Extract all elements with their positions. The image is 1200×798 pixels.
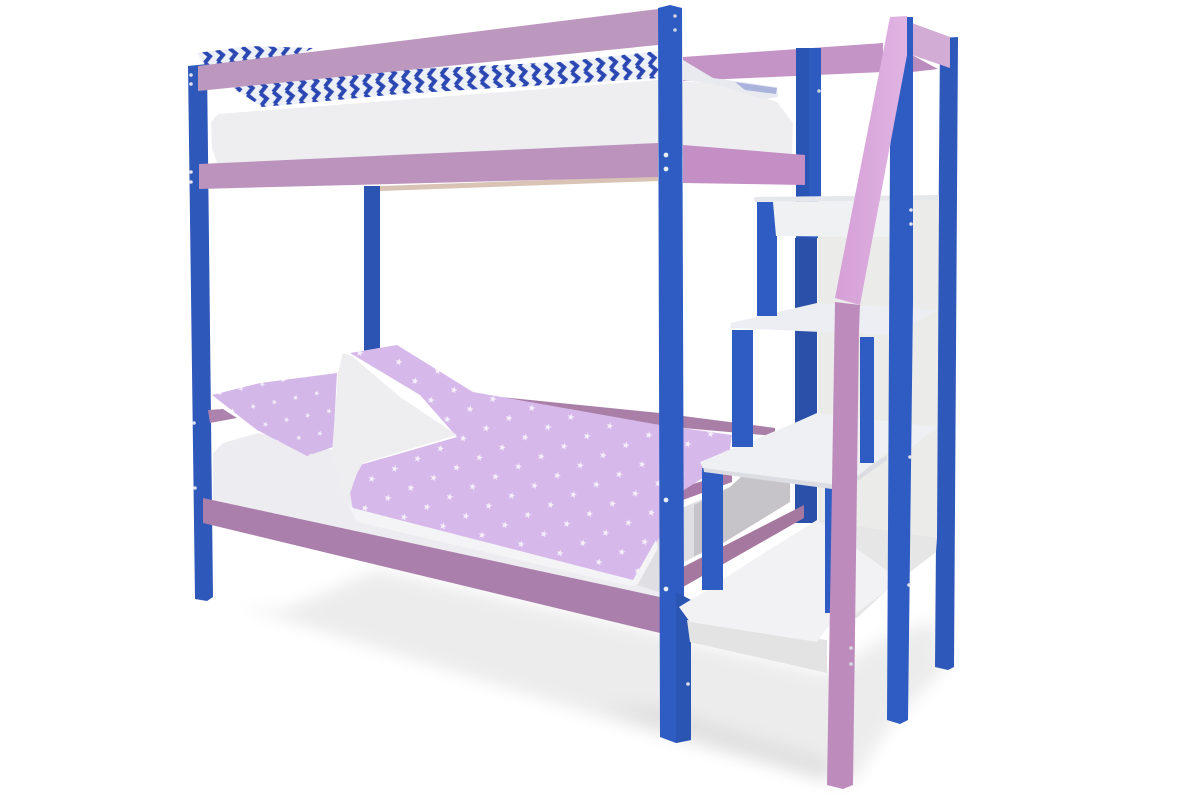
middle stair legs [732, 330, 874, 463]
upper mattress [211, 80, 793, 163]
third stair step [700, 413, 937, 489]
middle front post [658, 5, 691, 743]
lower mattress [213, 433, 660, 600]
stair front post [887, 17, 913, 724]
top stair leg [757, 202, 777, 316]
lower back rail [480, 395, 775, 436]
back pillow chevron [197, 46, 313, 65]
back left post [364, 186, 380, 351]
second stair step [730, 303, 938, 335]
far right post [935, 37, 958, 670]
end rail between stair post and right post [912, 23, 950, 68]
upper front side rail [199, 143, 805, 189]
back rail of upper bunk [683, 43, 938, 81]
upper slats [380, 176, 658, 191]
top stair step [754, 195, 939, 237]
stair handrail [827, 16, 907, 789]
upper chevron blanket [233, 51, 778, 107]
lower right lilac rails [683, 472, 804, 587]
upper front guard rail [198, 9, 658, 91]
stair legs [702, 468, 832, 613]
folded white sheet [332, 353, 457, 505]
lower front rail [203, 498, 660, 633]
lower star blanket [347, 345, 732, 586]
mattress right side [637, 475, 790, 600]
pillow [212, 373, 337, 456]
bottom stair step [679, 520, 937, 673]
floor shadow [240, 570, 945, 782]
lower left rail stub [208, 409, 237, 423]
back right post [795, 48, 821, 523]
left front post [188, 64, 213, 601]
staircase side panel [818, 200, 939, 610]
